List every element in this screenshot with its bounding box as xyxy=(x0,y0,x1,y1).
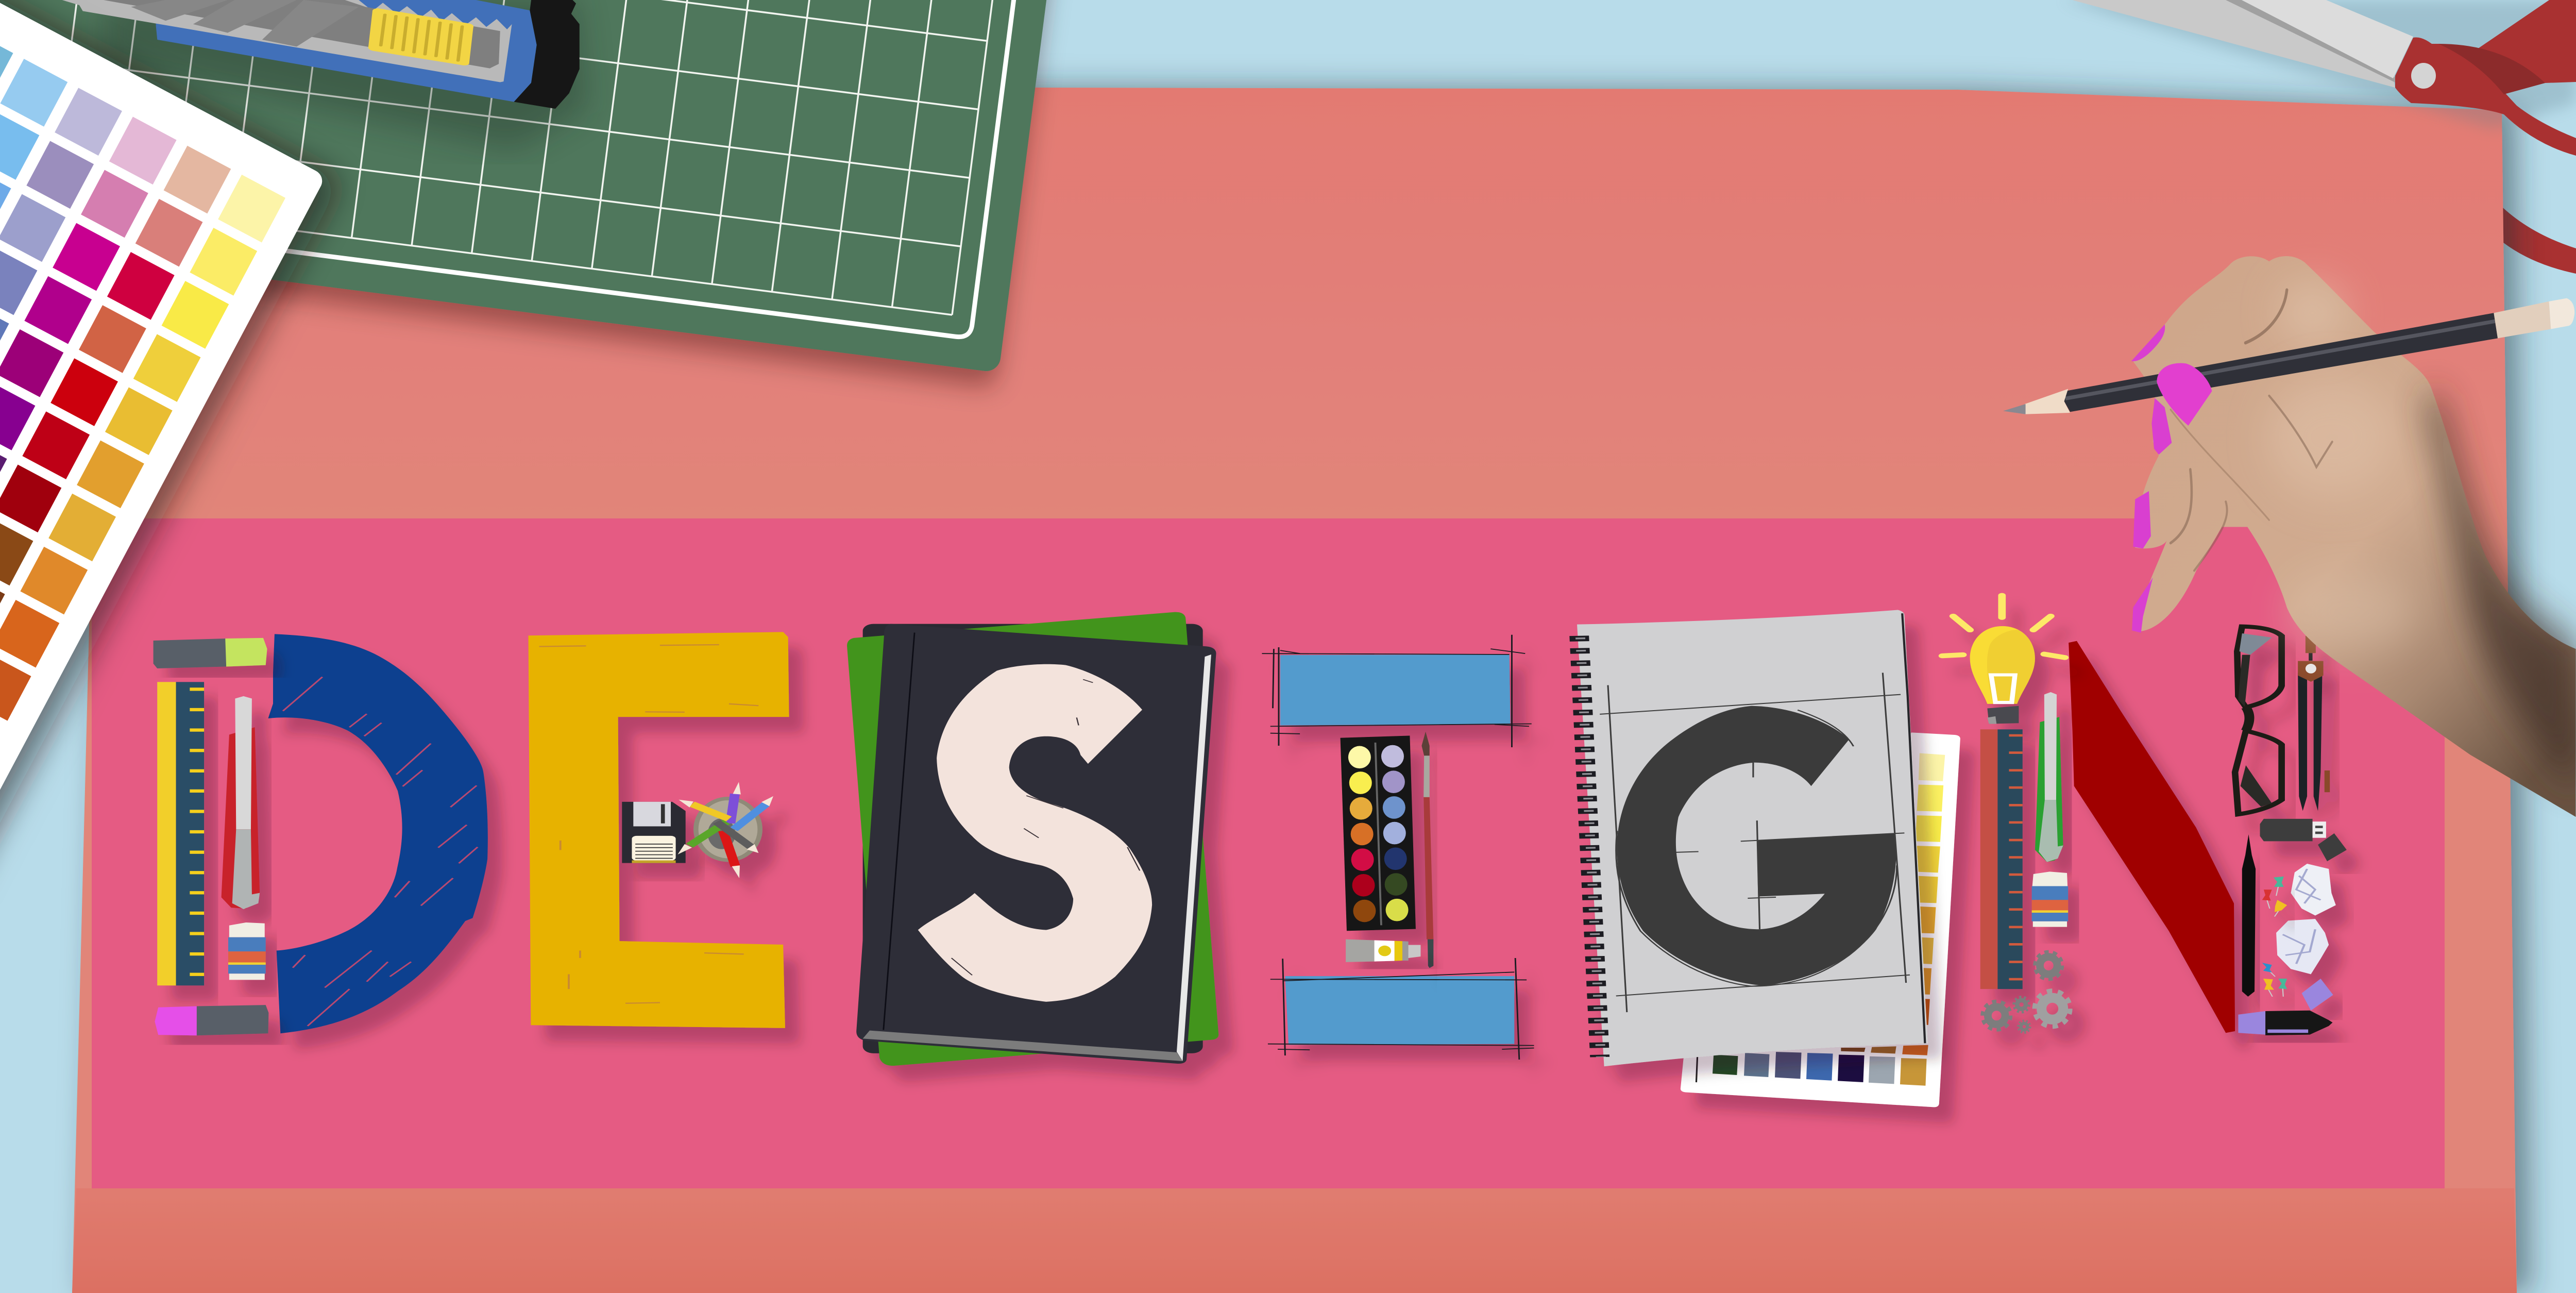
S scratch marks xyxy=(952,679,1140,975)
green book xyxy=(847,612,1218,1066)
colour swatch chart xyxy=(0,0,326,1086)
D ruler xyxy=(157,682,204,985)
swatches column 4 xyxy=(0,88,122,368)
icon: pencils in holder xyxy=(677,782,773,878)
icon: utility knife on mat xyxy=(62,0,580,109)
pink nails xyxy=(2131,325,2212,633)
letter E xyxy=(529,632,789,1028)
swatches column 2 xyxy=(0,146,231,639)
I top bar with sketch lines xyxy=(1262,635,1532,747)
glasses xyxy=(2235,627,2282,814)
paint brush xyxy=(1421,732,1433,968)
paint tube xyxy=(1346,939,1420,962)
panel: pink band xyxy=(92,518,2445,1188)
scissors handle strips behind paper xyxy=(2494,198,2576,274)
purple highlighter xyxy=(2238,1011,2333,1035)
hand highlights and creases xyxy=(2171,286,2576,792)
hand holding pencil xyxy=(2003,256,2576,817)
D bowl xyxy=(268,634,488,1033)
spiral binding xyxy=(1579,636,1600,1057)
letter S xyxy=(847,612,1218,1066)
icon: floppy disk xyxy=(622,802,686,863)
N diagonal stroke xyxy=(2069,641,2235,1033)
swatches column 6 xyxy=(0,30,13,98)
drawing compass xyxy=(2298,636,2330,811)
G letterform xyxy=(1617,706,1896,985)
E body xyxy=(529,632,789,1028)
back sketchbook xyxy=(863,624,1203,1053)
I bottom bar with sketch lines xyxy=(1268,958,1534,1060)
USB stick xyxy=(2260,819,2347,861)
D eraser xyxy=(228,922,266,980)
purple wedge xyxy=(2302,979,2333,1011)
hand skin xyxy=(2133,256,2576,817)
S letterform xyxy=(918,664,1152,1002)
book spine line xyxy=(884,633,914,1030)
N ruler xyxy=(1980,729,2023,989)
navy book cover xyxy=(856,624,1216,1064)
cutting mat xyxy=(0,0,1064,373)
D utility knife xyxy=(222,696,260,909)
colour fan card xyxy=(1681,732,1960,1107)
letter D xyxy=(154,634,488,1035)
gears xyxy=(1982,952,2070,1033)
G construction lines xyxy=(1600,673,1910,1012)
swatches column 1 xyxy=(0,175,285,721)
crumpled paper balls xyxy=(2276,864,2336,974)
swatches column 5 xyxy=(0,59,67,233)
black pen xyxy=(2242,834,2256,997)
D highlighter bottom xyxy=(155,1005,268,1035)
watercolour palette xyxy=(1341,736,1416,931)
shadow of knife on mat xyxy=(103,0,587,149)
N eraser xyxy=(2032,871,2068,927)
push pins xyxy=(2262,877,2287,997)
pencil xyxy=(2003,298,2574,414)
letter I xyxy=(1262,635,1534,1060)
letter G xyxy=(1577,610,1960,1107)
scissors xyxy=(2061,0,2576,156)
spiral notebook xyxy=(1577,610,1928,1066)
icon: light bulb xyxy=(1942,595,2065,724)
letter N and tools xyxy=(1942,595,2347,1035)
book pages xyxy=(1177,654,1211,1061)
swatches column 3 xyxy=(0,117,177,503)
D highlighter top xyxy=(154,638,267,668)
N green utility knife xyxy=(2035,692,2063,862)
